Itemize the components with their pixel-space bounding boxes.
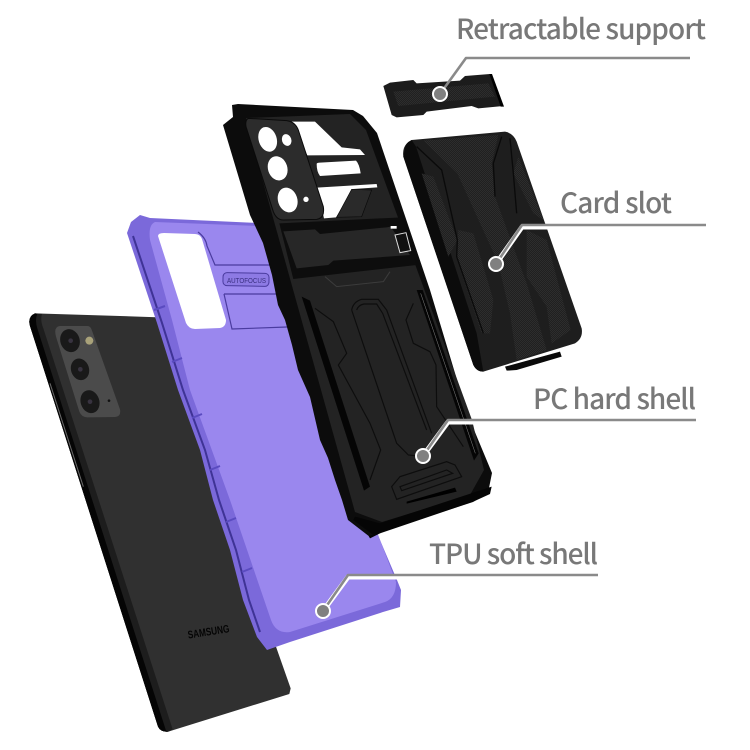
- back panel contours: [315, 299, 463, 499]
- AUTOFOCUS badge: AUTOFOCUS: [227, 276, 266, 285]
- camera module: [55, 326, 120, 417]
- callout: Card slot: [489, 182, 706, 271]
- PC hard shell: black case: [223, 104, 492, 538]
- callout: PC hard shell: [416, 378, 696, 463]
- TPU soft shell: purple case: [127, 215, 401, 650]
- stand hinge: [337, 189, 372, 217]
- bottom edge: [353, 487, 492, 538]
- raised panels: [198, 232, 287, 329]
- brand text: SAMSUNG: [187, 623, 230, 642]
- callout: Retractable support: [433, 8, 706, 101]
- bottom slit: [407, 488, 457, 504]
- side grip channel: [133, 236, 260, 632]
- callout: PC hard shell: PC hard shell: [533, 378, 696, 418]
- callout: Card slot: Card slot: [560, 182, 672, 222]
- card slot part: [403, 132, 582, 372]
- upper cut-outs: [292, 122, 377, 218]
- callout: TPU soft shell: TPU soft shell: [429, 533, 598, 573]
- callout: Retractable support: Retractable support: [456, 8, 706, 48]
- kickstand band: [279, 217, 417, 287]
- camera cut-out: [158, 233, 226, 329]
- phone: Samsung back: [29, 313, 291, 732]
- right rail: [417, 290, 479, 461]
- camera island: [246, 118, 324, 220]
- left rail: [302, 297, 370, 491]
- AUTOFOCUS badge: [223, 273, 269, 286]
- callout: TPU soft shell: [316, 533, 598, 618]
- retractable support part: [383, 74, 504, 117]
